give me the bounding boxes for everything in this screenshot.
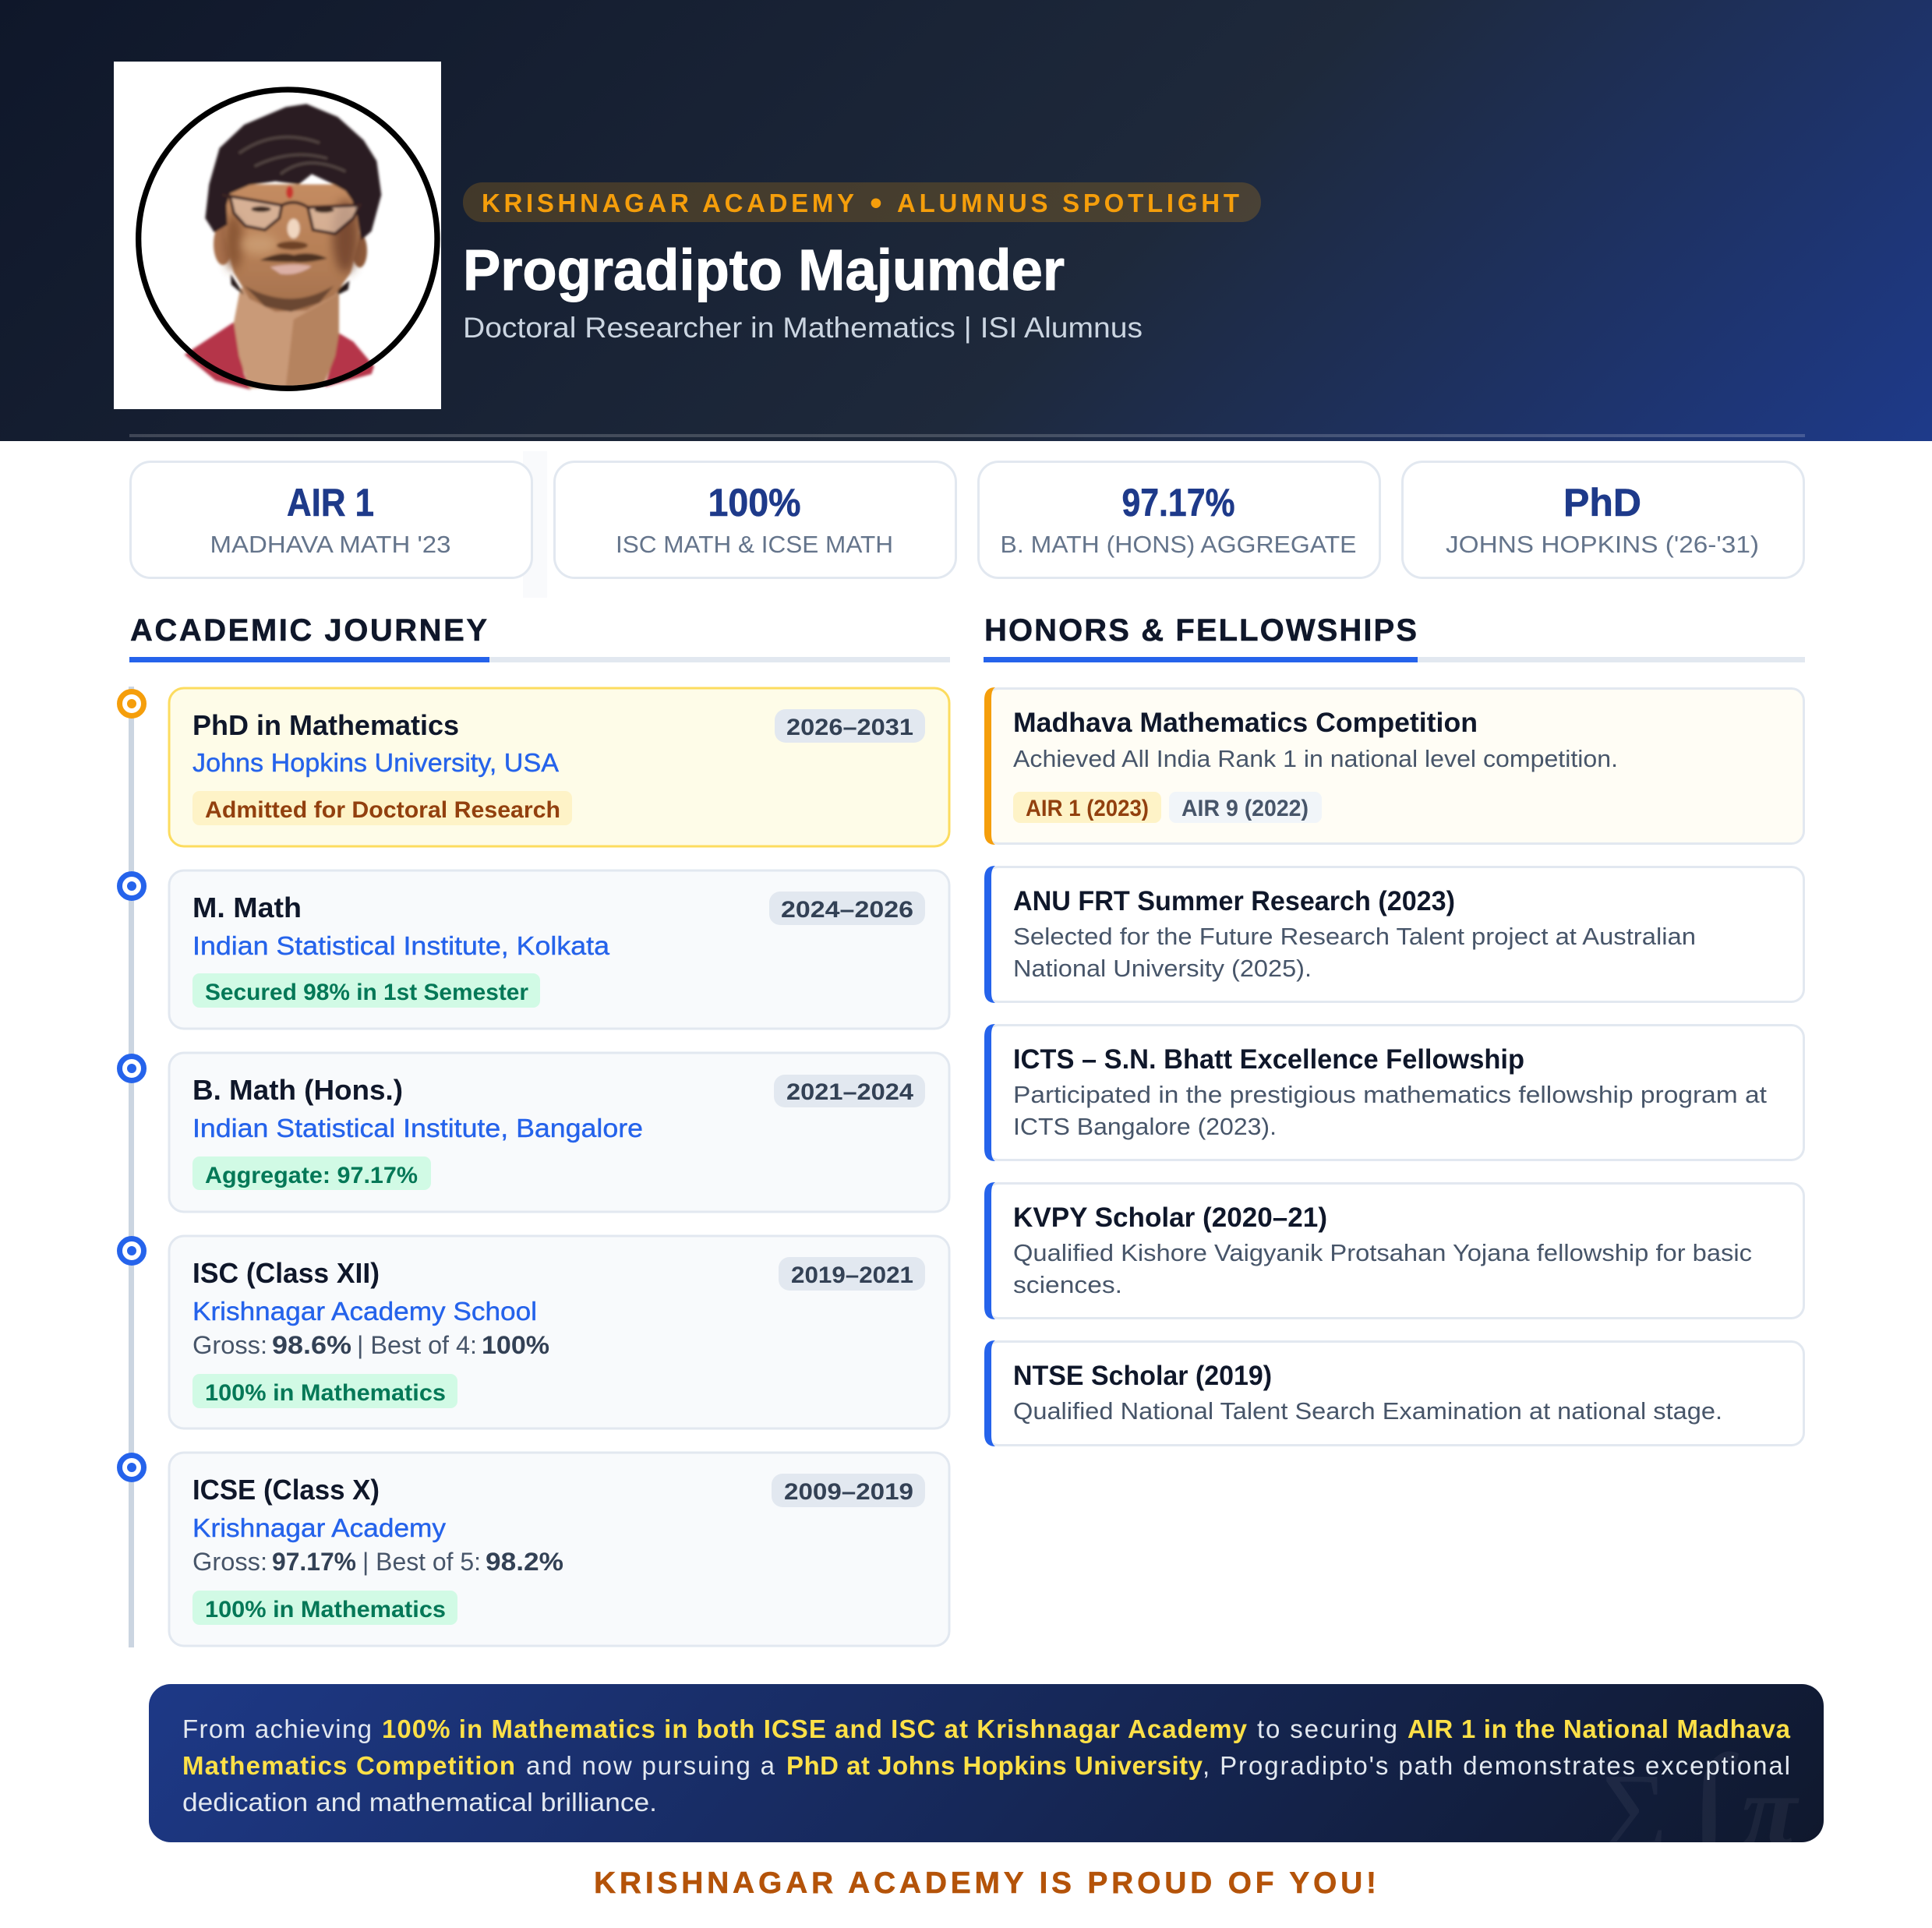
badge: alumnus spotlight: ALUMNUS SPOTLIGHT — [897, 189, 1239, 217]
hair — [205, 104, 381, 240]
neck shadows — [231, 274, 244, 295]
honor card: ANU FRT: National University (2025). — [1013, 955, 1312, 982]
honor card: ICTS — [984, 1024, 1803, 1161]
journey card: B. Math: Indian Statistical Institute, Bangalore — [192, 1114, 643, 1142]
journey card: PhD: 2026–2031 — [786, 715, 913, 740]
summary text: Mathematics Competition — [182, 1751, 515, 1780]
badge: alumnus spotlight: • — [870, 184, 882, 222]
summary text: dedication and mathematical brilliance. — [182, 1788, 657, 1817]
journey card: ICSE: | Best of 5: — [362, 1548, 481, 1576]
journey card: ISC: 2019–2021 — [791, 1262, 913, 1288]
circle frame — [139, 90, 437, 388]
faint strip artifact — [523, 451, 547, 598]
journey card: B. Math: B. Math (Hons.) — [192, 1074, 403, 1106]
honor card: ANU FRT — [984, 866, 1803, 1003]
marker: B. Math — [120, 1057, 143, 1080]
summary text — [182, 1714, 1791, 1817]
timeline axis with markers — [120, 687, 143, 1647]
honor card: Madhava: Madhava Mathematics Competition — [1013, 708, 1478, 738]
beard — [244, 286, 334, 312]
journey card: M. Math: 2024–2026 — [781, 897, 913, 923]
footer message: KRISHNAGAR ACADEMY IS PROUD OF YOU! — [594, 1866, 1376, 1900]
journey card: PhD: Admitted for Doctoral Research — [205, 797, 560, 823]
journey card: B. Math: Aggregate: 97.17% — [205, 1163, 418, 1188]
marker: M. Math — [120, 874, 143, 898]
profile photo — [114, 62, 441, 409]
eyes — [251, 207, 271, 212]
honor card: KVPY: Qualified Kishore Vaigyanik Protsahan Yojana fellowship for basic — [1013, 1239, 1752, 1266]
honor card: Madhava: AIR 9 (2022) — [1181, 796, 1309, 821]
shirt — [185, 322, 374, 390]
honor card: NTSE: Qualified National Talent Search Examination at national stage. — [1013, 1397, 1722, 1425]
stat: AIR 1 — [131, 461, 532, 578]
honor card: ICTS: Participated in the prestigious mathematics fellowship program at — [1013, 1081, 1767, 1108]
ears — [214, 224, 232, 265]
honor card: KVPY: KVPY Scholar (2020–21) — [1013, 1202, 1327, 1233]
journey card: ICSE — [169, 1453, 949, 1646]
mustache — [260, 253, 327, 263]
stat: AIR 1: MADHAVA MATH '23 — [210, 531, 450, 558]
journey card: ISC: | Best of 4: — [357, 1331, 477, 1359]
watermark math symbols: π — [1742, 1755, 1800, 1867]
journey card: M. Math: Indian Statistical Institute, Kolkata — [192, 931, 610, 960]
stat: 100% — [555, 461, 955, 578]
heading: honors and fellowships: HONORS & FELLOWSHIPS — [984, 613, 1417, 648]
journey card: M. Math — [169, 870, 949, 1029]
marker: ISC — [120, 1239, 143, 1262]
heading: academic journey: ACADEMIC JOURNEY — [130, 613, 487, 648]
watermark math symbols: Σ — [1602, 1751, 1667, 1876]
summary text: and now pursuing a — [526, 1751, 775, 1780]
journey card: ICSE: Gross: — [192, 1548, 267, 1576]
honor card: Madhava: AIR 1 (2023) — [1026, 796, 1149, 821]
nose — [288, 219, 300, 238]
watermark math symbols: ∫ — [1679, 1725, 1739, 1905]
journey card: ICSE: 100% in Mathematics — [205, 1597, 446, 1623]
stat: PhD: JOHNS HOPKINS ('26-'31) — [1446, 531, 1759, 558]
honor card: KVPY: sciences. — [1013, 1271, 1122, 1298]
watermark math symbols — [1607, 1752, 1799, 1842]
tilak — [286, 186, 293, 199]
summary text: From achieving — [182, 1714, 372, 1743]
lips — [270, 264, 312, 274]
glasses — [230, 196, 360, 234]
honor card: NTSE — [984, 1340, 1803, 1446]
journey card: ICSE: 97.17% — [272, 1548, 356, 1576]
heading: academic journey — [129, 613, 950, 662]
neck and chest — [234, 286, 339, 388]
heading: honors and fellowships — [984, 613, 1805, 662]
journey card: ISC: 100% — [482, 1331, 549, 1359]
journey card: ISC: 100% in Mathematics — [205, 1380, 446, 1406]
honor card: ANU FRT: Selected for the Future Research Talent project at Australian — [1013, 923, 1696, 950]
stat: 97.17%: 97.17% — [1122, 481, 1234, 524]
stat: PhD — [1403, 461, 1803, 578]
header banner — [0, 0, 1932, 441]
journey card: ICSE: ICSE (Class X) — [192, 1474, 380, 1506]
face shading — [333, 200, 358, 273]
honor card: KVPY — [984, 1182, 1803, 1319]
summary text: 100% in Mathematics in both ICSE and ISC at Krishnagar Academy — [382, 1714, 1248, 1743]
stat: 97.17% — [979, 461, 1379, 578]
honor card: Madhava — [984, 687, 1803, 845]
summary text: AIR 1 in the National Madhava — [1407, 1714, 1791, 1743]
summary text: to securing — [1257, 1714, 1397, 1743]
journey card: PhD: PhD in Mathematics — [192, 709, 459, 741]
journey card: ISC: ISC (Class XII) — [192, 1257, 380, 1289]
marker: PhD — [120, 692, 143, 715]
face — [224, 185, 360, 312]
summary text: , Progradipto's path demonstrates exceptional — [1203, 1751, 1790, 1780]
summary banner — [149, 1684, 1824, 1842]
journey card: B. Math — [169, 1053, 949, 1212]
stat: 100%: ISC MATH & ICSE MATH — [616, 531, 893, 558]
journey card: ICSE: 98.2% — [486, 1548, 563, 1576]
journey card: ISC — [169, 1236, 949, 1428]
marker: ICSE — [120, 1456, 143, 1479]
stat: PhD: PhD — [1563, 481, 1641, 524]
journey card: ICSE: 2009–2019 — [784, 1479, 913, 1505]
badge: alumnus spotlight: KRISHNAGAR ACADEMY — [482, 189, 854, 217]
name title: Progradipto Majumder — [463, 238, 1065, 302]
subtitle: Doctoral Researcher in Mathematics | ISI Alumnus — [463, 312, 1143, 344]
stat: 100%: 100% — [708, 481, 801, 524]
journey card: M. Math: Secured 98% in 1st Semester — [205, 980, 528, 1005]
honor card: ICTS: ICTS Bangalore (2023). — [1013, 1113, 1277, 1140]
badge: alumnus spotlight — [463, 182, 1261, 222]
journey card: M. Math: M. Math — [192, 892, 302, 923]
journey card: ISC: Krishnagar Academy School — [192, 1297, 537, 1326]
stat: 97.17%: B. MATH (HONS) AGGREGATE — [1001, 531, 1356, 558]
honor card: ICTS: ICTS – S.N. Bhatt Excellence Fellowship — [1013, 1044, 1524, 1075]
journey card: B. Math: 2021–2024 — [786, 1079, 913, 1105]
journey card: ISC: Gross: — [192, 1331, 267, 1359]
honor card: ANU FRT: ANU FRT Summer Research (2023) — [1013, 886, 1455, 916]
stat cards — [131, 461, 1803, 578]
stat: AIR 1: AIR 1 — [287, 481, 374, 524]
honor card: NTSE: NTSE Scholar (2019) — [1013, 1361, 1272, 1391]
honor card: Madhava: Achieved All India Rank 1 in national level competition. — [1013, 745, 1618, 772]
journey card: ICSE: Krishnagar Academy — [192, 1513, 447, 1542]
journey card: PhD — [169, 688, 949, 846]
journey card: PhD: Johns Hopkins University, USA — [192, 748, 559, 777]
summary text: PhD at Johns Hopkins University — [786, 1751, 1203, 1780]
journey card: ISC: 98.6% — [272, 1331, 351, 1359]
